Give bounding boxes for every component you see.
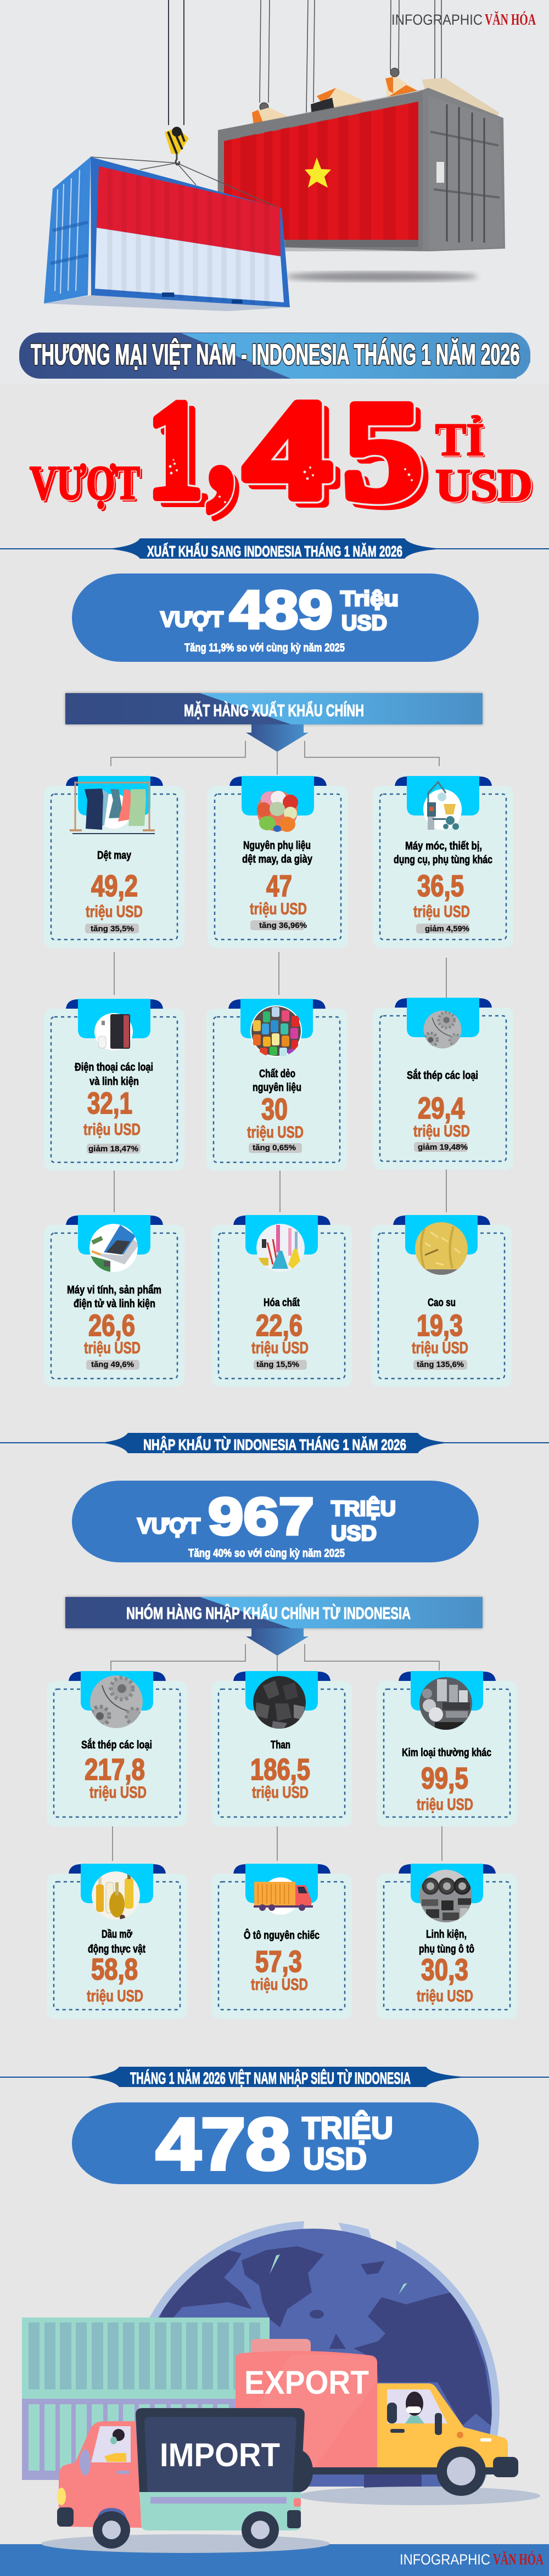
import total pill: TRIỆU <box>331 1497 396 1521</box>
title bar <box>19 333 530 379</box>
connectors export <box>111 741 446 1212</box>
item label <box>253 1068 301 1094</box>
export total pill: Triệu <box>340 587 399 611</box>
hook and slings <box>91 127 277 207</box>
icon: yarn balls <box>257 791 298 832</box>
globe <box>149 2221 500 2488</box>
icon: phone <box>94 1013 133 1050</box>
value: 30 <box>261 1092 288 1126</box>
item label <box>67 1284 161 1310</box>
export total pill: USD <box>341 611 387 635</box>
card: dệt may <box>44 776 184 948</box>
number 1,45 <box>147 363 429 535</box>
card: máy móc <box>373 776 513 948</box>
container shadow <box>285 272 478 282</box>
bottom illustration: trucks and globe <box>0 2217 549 2576</box>
unit: tỉ usd: USD <box>435 460 533 511</box>
unit: tỉ usd: TỈ <box>435 414 484 465</box>
unit: tỉ usd <box>435 414 535 513</box>
value: 186,5 <box>250 1752 310 1786</box>
change tag: tăng 135,6% <box>417 1360 464 1369</box>
item label: Sắt thép các loại <box>81 1738 152 1751</box>
change tag: tăng 36,96% <box>259 921 307 930</box>
import truck <box>57 2408 305 2549</box>
ground band <box>0 2544 549 2576</box>
headline figure <box>30 363 535 535</box>
star <box>305 158 331 188</box>
value: 99,5 <box>421 1761 468 1795</box>
unit: triệu USD <box>412 1339 468 1357</box>
item label: Máy vi tính, sản phẩm <box>67 1284 161 1296</box>
value: 217,8 <box>85 1752 145 1786</box>
item label: Dệt may <box>97 850 132 862</box>
change tag: tăng 49,6% <box>91 1360 134 1369</box>
icon: truck <box>254 1877 313 1915</box>
value: 36,5 <box>417 869 464 903</box>
change tag: giảm 19,48% <box>418 1143 468 1152</box>
unit: triệu USD <box>413 903 470 921</box>
item label: Chất dẻo <box>259 1068 295 1080</box>
value: 22,6 <box>256 1308 302 1342</box>
section banner: trade deficit <box>0 2067 549 2088</box>
vượt label: VƯỢT <box>32 459 142 512</box>
unit: triệu USD <box>413 1122 470 1140</box>
import total pill: Tăng 40% so với cùng kỳ năm 2025 <box>188 1547 345 1560</box>
item label: Máy móc, thiết bị, <box>405 840 482 852</box>
unit: triệu USD <box>417 1987 473 2005</box>
card: cao su <box>371 1215 512 1387</box>
header: main export goods <box>65 693 483 752</box>
import total pill: VƯỢT <box>137 1514 200 1538</box>
number 1,45: , <box>208 363 235 520</box>
arrow <box>246 1628 309 1656</box>
value: 49,2 <box>91 869 138 903</box>
item label: phụ tùng ô tô <box>419 1943 474 1955</box>
import truck: IMPORT <box>160 2437 280 2473</box>
number 1,45: 5 <box>343 372 422 529</box>
header: main import goods <box>65 1597 483 1656</box>
item label: động thực vật <box>88 1943 145 1955</box>
export truck <box>236 2339 540 2505</box>
vietnam flag container <box>217 68 505 251</box>
icon: laptop <box>89 1224 139 1272</box>
unit: triệu USD <box>251 1976 308 1994</box>
deficit pill <box>72 2102 479 2185</box>
unit: triệu USD <box>83 1121 141 1139</box>
item label: và linh kiện <box>89 1076 139 1088</box>
change tag: tăng 35,5% <box>91 924 134 933</box>
item label: nguyên liệu <box>253 1082 301 1094</box>
unit: triệu USD <box>417 1796 473 1814</box>
logo bottom <box>400 2550 544 2568</box>
import driver <box>104 2429 126 2462</box>
number 1,45: 5 <box>350 378 429 535</box>
change tag: giảm 18,47% <box>88 1144 138 1154</box>
number 1,45: 4 <box>244 371 331 528</box>
card: nguyên phụ liệu <box>208 776 348 948</box>
number 1,45: 1 <box>147 371 203 528</box>
unit: tỉ usd: TỈ <box>435 414 484 465</box>
unit: triệu USD <box>252 1784 309 1802</box>
item label <box>242 840 313 865</box>
item label: dụng cụ, phụ tùng khác <box>394 854 492 866</box>
export total pill: Tăng 11,9% so với cùng kỳ năm 2025 <box>184 642 345 654</box>
item label: Điện thoại các loại <box>75 1061 153 1073</box>
unit: triệu USD <box>250 900 307 918</box>
change tag: giảm 4,59% <box>425 924 469 933</box>
logo top: INFOGRAPHIC <box>391 12 483 28</box>
item label <box>419 1928 474 1955</box>
section banner: export <box>0 538 549 560</box>
unit: triệu USD <box>89 1784 147 1802</box>
value: 47 <box>266 869 292 903</box>
icon: coal <box>253 1676 306 1729</box>
unit: triệu USD <box>86 903 143 921</box>
unit: tỉ usd: TỈ <box>437 416 486 467</box>
unit: triệu USD <box>84 1339 141 1357</box>
icon: oil bottles <box>92 1871 140 1920</box>
logo bottom: INFOGRAPHIC <box>400 2551 490 2568</box>
icon: machinery <box>423 782 462 830</box>
value: 57,3 <box>255 1944 302 1978</box>
hero illustration: hanging containers <box>44 0 505 311</box>
number 1,45: 4 <box>244 371 331 528</box>
card: dầu mỡ <box>47 1864 187 2019</box>
item label: dệt may, da giày <box>242 853 313 865</box>
card: ô tô <box>211 1864 352 2019</box>
unit: triệu USD <box>247 1123 304 1141</box>
number 1,45: 5 <box>343 372 422 529</box>
unit: tỉ usd: USD <box>438 462 535 513</box>
item label: Sắt thép các loại <box>407 1068 478 1082</box>
value: 58,8 <box>91 1952 138 1986</box>
unit: triệu USD <box>87 1987 143 2005</box>
icon: car parts <box>419 1870 472 1922</box>
header: main import goods: NHÓM HÀNG NHẬP KHẨU CHÍNH TỪ INDONESIA <box>126 1603 411 1623</box>
item label: Nguyên phụ liệu <box>243 840 311 852</box>
value: 29,4 <box>418 1091 464 1125</box>
number 1,45: 1 <box>155 377 211 534</box>
item label: Kim loại thường khác <box>402 1747 491 1759</box>
icon: gears <box>423 1010 462 1049</box>
section banner: import <box>0 1433 549 1453</box>
vượt label: VƯỢT <box>30 457 140 510</box>
export truck: EXPORT <box>244 2364 369 2401</box>
card: chất dẻo <box>206 999 347 1171</box>
card: than <box>211 1671 352 1826</box>
icon: gears <box>90 1675 143 1728</box>
export driver <box>405 2392 424 2423</box>
icon: metal bars <box>419 1677 472 1730</box>
card: máy vi tính <box>44 1215 184 1387</box>
value: 30,3 <box>421 1953 468 1987</box>
number 1,45: 1 <box>147 371 203 528</box>
card: sắt thép nhập <box>47 1671 187 1826</box>
icon: clothes rack <box>70 781 155 834</box>
card: sắt thép <box>373 998 513 1169</box>
change tag: tăng 15,5% <box>256 1360 299 1369</box>
change tag: tăng 0,65% <box>253 1143 296 1152</box>
vượt label: VƯỢT <box>30 457 140 510</box>
card: điện thoại <box>44 999 184 1171</box>
ground shadow <box>41 2534 330 2553</box>
item label: Cao su <box>428 1297 456 1309</box>
section banner: import: NHẬP KHẨU TỪ INDONESIA THÁNG 1 NĂM 2026 <box>143 1436 406 1453</box>
indonesia flag container <box>44 157 290 311</box>
section banner: export: XUẤT KHẨU SANG INDONESIA THÁNG 1 NĂM 2026 <box>147 543 402 560</box>
import total pill <box>72 1481 479 1562</box>
item label: Hóa chất <box>264 1297 300 1309</box>
value: 26,6 <box>88 1308 135 1342</box>
connectors import <box>111 1644 442 1861</box>
icon: rubber <box>415 1222 468 1275</box>
crane cables <box>169 0 441 125</box>
card: kim loại <box>377 1671 517 1826</box>
card: hóa chất <box>211 1215 352 1387</box>
logo top <box>391 10 536 29</box>
value: 32,1 <box>87 1086 132 1120</box>
item label <box>394 840 492 866</box>
import total pill: USD <box>331 1522 377 1545</box>
number 1,45: 4 <box>251 377 338 534</box>
deficit pill: USD <box>303 2141 367 2176</box>
item label: Linh kiện, <box>426 1928 467 1941</box>
icon: plastic beads <box>250 1005 302 1057</box>
item label: Dầu mỡ <box>102 1928 133 1941</box>
item label: Ô tô nguyên chiếc <box>244 1928 320 1942</box>
header: main export goods: MẶT HÀNG XUẤT KHẨU CHÍNH <box>184 701 364 720</box>
stacked containers <box>22 2318 270 2480</box>
export total pill <box>72 573 479 662</box>
arrow <box>246 724 309 752</box>
value: 19,3 <box>417 1308 463 1342</box>
number 1,45: , <box>213 369 240 526</box>
unit: triệu USD <box>251 1339 309 1357</box>
icon: chemistry flasks <box>256 1224 305 1272</box>
export total pill: 489 <box>229 580 333 640</box>
item label: điện tử và linh kiện <box>74 1298 155 1310</box>
item label <box>75 1061 153 1088</box>
deficit pill: 478 <box>156 2103 290 2185</box>
unit: tỉ usd: USD <box>435 460 533 511</box>
card: linh kiện ô tô <box>377 1864 517 2019</box>
import total pill: 967 <box>208 1487 314 1546</box>
number 1,45: , <box>208 363 235 520</box>
deficit pill: TRIỆU <box>302 2110 393 2146</box>
export total pill: VƯỢT <box>160 608 223 632</box>
item label <box>88 1928 145 1955</box>
item label: Than <box>271 1739 290 1751</box>
